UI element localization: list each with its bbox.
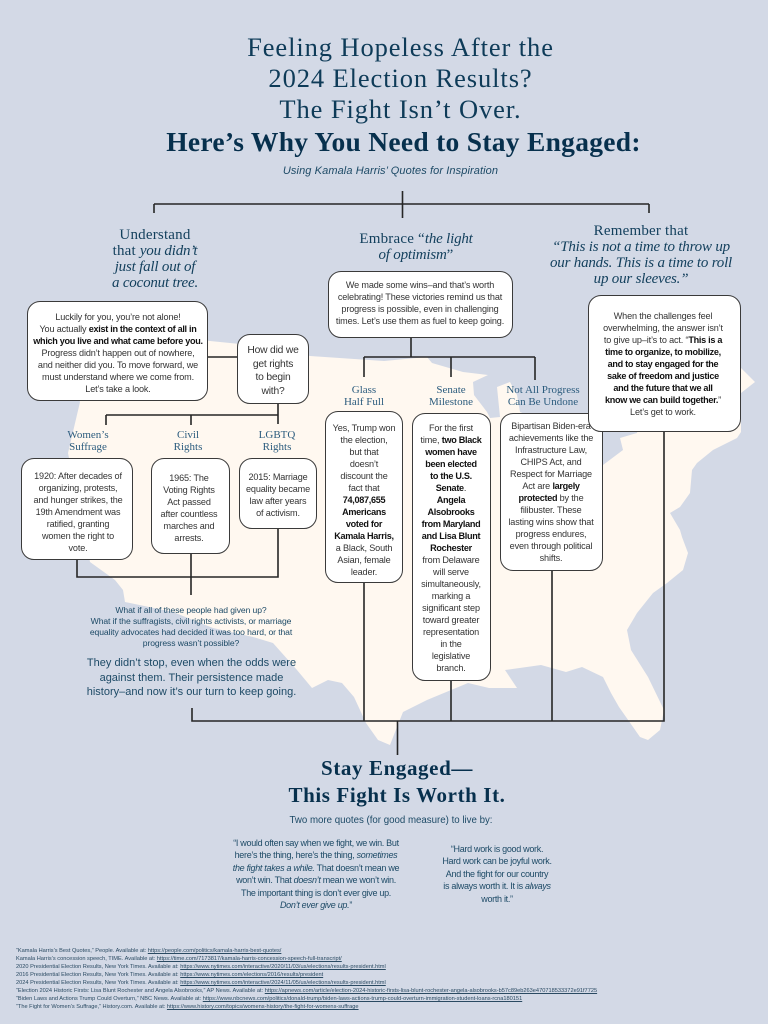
text: they didn't stop: They didn’t stop, even when the odds were xyxy=(87,657,296,669)
heading: senate milestone: Milestone xyxy=(429,396,473,408)
text: senate milestone: Angela xyxy=(437,495,465,505)
text: senate milestone: from Delaware xyxy=(422,555,480,565)
text: not all progress: Infrastructure Law, xyxy=(515,445,587,455)
text: not all progress: shifts. xyxy=(540,553,562,563)
text: context: You actually exist in the context of all in xyxy=(39,324,197,334)
text: 1965: marches and xyxy=(164,521,214,531)
text: remember: sake of freedom and justice xyxy=(607,371,719,381)
heading: civil rights: Rights xyxy=(174,441,202,453)
text: not all progress: CHIPS Act, and xyxy=(520,457,582,467)
sources: “Kamala Harris’s Best Quotes,” People. Available at: https://people.com/politics/kamala-harris-best-quotes/ xyxy=(16,948,281,954)
text: senate milestone: For the first xyxy=(429,423,473,433)
text: question: get rights xyxy=(253,359,293,370)
text: senate milestone: women have xyxy=(425,447,477,457)
text: remember: When the challenges feel xyxy=(614,311,712,321)
text: remember: time to organize, to mobilize, xyxy=(605,347,721,357)
quote: hard work: worth it.” xyxy=(481,894,513,904)
text: 2015: law after years xyxy=(250,496,306,506)
text: glass half full: doesn’t xyxy=(350,459,378,469)
heading: embrace: Embrace “the light xyxy=(359,231,473,247)
panel: 1965 xyxy=(151,458,230,554)
text: not all progress: filibuster. These xyxy=(520,505,581,515)
sources: “Election 2024 Historic Firsts: Lisa Blunt Rochester and Angela Alsobrooks,” AP News. Available at: https://apnews.com/article/election-2024-historic-firsts-lisa-blunt-rochester-angela-alsobrooks-b57c89eb263e470718533372e91f7725 xyxy=(16,988,597,994)
text: context: and neither did you. To move forward, we xyxy=(38,360,198,370)
text: senate milestone: time, two Black xyxy=(420,435,482,445)
heading: LGBTQ rights: LGBTQ xyxy=(259,429,295,441)
text: glass half full: Yes, Trump won xyxy=(333,423,395,433)
panel: remember xyxy=(588,295,741,432)
text: optimism xyxy=(336,280,504,326)
quote: hard work: Hard work can be joyful work. xyxy=(442,856,552,866)
text: remember: to give up–it’s to act. “This is a xyxy=(604,335,722,345)
text: what if: What if the suffragists, civil rights activists, or marriage xyxy=(91,616,291,626)
text: optimism: celebrating! These victories remind us that xyxy=(338,292,502,302)
text: 1920 xyxy=(33,471,123,553)
quote: fight takes a while: won’t win. That doesn’t mean we won’t win. xyxy=(236,875,396,885)
text: 2015: 2015: Marriage xyxy=(248,472,308,482)
text: context xyxy=(33,312,203,394)
sources: 2016 Presidential Election Results, New York Times. Available at: https://www.nytimes.com/elections/2016/results/president xyxy=(16,972,323,978)
quote: hard work: “Hard work is good work. xyxy=(451,844,543,854)
text: not all progress: Respect for Marriage xyxy=(510,469,592,479)
heading: not all progress: Can Be Undone xyxy=(508,396,578,408)
quote: fight takes a while: here’s the thing, here’s the thing, sometimes xyxy=(235,850,397,860)
heading: understand: that you didn’t xyxy=(113,243,197,259)
text: senate milestone: representation xyxy=(423,627,479,637)
panel: not all progress xyxy=(500,413,603,571)
text: senate milestone xyxy=(420,423,482,673)
text: senate milestone: legislative xyxy=(432,651,470,661)
text: 2015 xyxy=(246,472,310,518)
sources: “Biden Laws and Actions Trump Could Overturn,” NBC News. Available at: https://www.nbcnews.com/politics/donald-trump/biden-laws-actions-trump-could-overturn-immigration-student-loans-rcna180151 xyxy=(16,996,522,1002)
heading: civil rights xyxy=(174,429,202,453)
text: glass half full: but that xyxy=(349,447,379,457)
quote: fight takes a while: “I would often say when we fight, we win. But xyxy=(233,838,399,848)
heading: civil rights: Civil xyxy=(177,429,199,441)
text: 1920: 1920: After decades of xyxy=(34,471,122,481)
heading: stay engaged: Stay Engaged— xyxy=(321,756,473,780)
panel: context xyxy=(27,301,208,401)
text: senate milestone: toward greater xyxy=(423,615,479,625)
heading: remember: our hands. This is a time to roll xyxy=(550,255,732,271)
text: context: which you live and what came before you. xyxy=(33,336,203,346)
text: remember: know we can build together.” xyxy=(605,395,721,405)
text: glass half full: Kamala Harris, xyxy=(334,531,394,541)
text: senate milestone: been elected xyxy=(425,459,477,469)
text: two more quotes: Two more quotes (for good measure) to live by: xyxy=(290,815,492,826)
heading: remember: “This is not a time to throw up xyxy=(552,239,730,255)
text: glass half full: fact that xyxy=(348,483,380,493)
text: senate milestone: marking a xyxy=(432,591,470,601)
heading: stay engaged: This Fight Is Worth It. xyxy=(288,782,506,806)
text: optimism: We made some wins–and that’s worth xyxy=(346,280,494,290)
sources: Kamala Harris’s concession speech, TIME. Available at: https://time.com/7173817/kamala-harris-concession-speech-full-transcript/ xyxy=(16,956,342,962)
panel: how did we get rights xyxy=(237,334,309,404)
text: they didn't stop: history–and now it’s our turn to keep going. xyxy=(87,686,296,698)
heading: senate milestone: Senate xyxy=(436,384,466,396)
text: what if: What if all of these people had given up? xyxy=(115,605,267,615)
text: not all progress: even through political xyxy=(510,541,592,551)
heading: understand: a coconut tree. xyxy=(112,275,198,291)
heading: embrace xyxy=(359,231,474,263)
heading: remember xyxy=(550,223,732,287)
heading: women's suffrage xyxy=(67,429,109,453)
text: not all progress: Act are largely xyxy=(522,481,580,491)
heading: LGBTQ rights xyxy=(258,429,296,453)
title: Feeling Hopeless After the xyxy=(247,32,554,62)
quote: hard work: And the fight for our country xyxy=(446,869,548,879)
heading: understand: just fall out of xyxy=(115,259,195,275)
text: senate milestone: to the U.S. xyxy=(430,471,472,481)
text: they didn't stop xyxy=(87,657,296,698)
text: senate milestone: Rochester xyxy=(430,543,472,553)
text: remember: and to stay engaged for the xyxy=(608,359,718,369)
text: glass half full: discount the xyxy=(340,471,388,481)
quote: fight takes a while: Don’t ever give up.” xyxy=(280,900,352,910)
text: context: Let’s take a look. xyxy=(85,384,151,394)
text: 1920: ratified, granting xyxy=(47,519,109,529)
text: senate milestone: Alsobrooks xyxy=(427,507,475,517)
text: 1965: arrests. xyxy=(174,533,204,543)
text: remember: overwhelming, the answer isn’t xyxy=(603,323,723,333)
text: remember: Let’s get to work. xyxy=(630,407,696,417)
text: not all progress: Bipartisan Biden-era xyxy=(511,421,591,431)
title xyxy=(166,32,641,157)
sources: “The Fight for Women’s Suffrage,” History.com. Available at: https://www.history.com/topics/womens-history/the-fight-for-womens-suffrage xyxy=(16,1004,359,1010)
text: senate milestone: from Maryland xyxy=(422,519,480,529)
heading: remember: Remember that xyxy=(594,223,688,239)
text: glass half full: voted for xyxy=(346,519,382,529)
sources xyxy=(16,948,598,1010)
text: question: How did we xyxy=(247,345,299,356)
heading: understand: Understand xyxy=(119,227,191,243)
text: senate milestone: branch. xyxy=(436,663,466,673)
panel: senate milestone xyxy=(412,413,491,681)
text: senate milestone: and Lisa Blunt xyxy=(422,531,480,541)
heading: senate milestone xyxy=(429,384,473,408)
text: they didn't stop: against them. Their persistence made xyxy=(100,672,283,684)
text: 1965 xyxy=(160,473,218,543)
panel: optimism xyxy=(328,271,513,338)
text: context: must understand where we come from. xyxy=(42,372,194,382)
heading: stay engaged xyxy=(288,756,506,806)
text: optimism: progress is possible, even in challenging xyxy=(341,304,499,314)
text: senate milestone: will serve xyxy=(433,567,469,577)
quote: hard work: is always worth it. It is always xyxy=(443,881,551,891)
text: glass half full: Americans xyxy=(342,507,386,517)
subtitle: Using Kamala Harris’ Quotes for Inspiration xyxy=(283,165,498,177)
heading: glass half full: Glass xyxy=(352,384,376,396)
title: The Fight Isn’t Over. xyxy=(279,94,522,124)
title: 2024 Election Results? xyxy=(268,63,533,93)
text: glass half full: the election, xyxy=(340,435,388,445)
text: glass half full: a Black, South xyxy=(336,543,392,553)
text: question xyxy=(247,345,299,397)
text: remember xyxy=(603,311,723,417)
heading: remember: up our sleeves.” xyxy=(594,271,688,287)
text: context: Luckily for you, you’re not alone! xyxy=(55,312,181,322)
heading: LGBTQ rights: Rights xyxy=(263,441,291,453)
panel: glass half full xyxy=(325,411,403,583)
text: 1965: 1965: The xyxy=(169,473,209,483)
title: Here’s Why You Need to Stay Engaged: xyxy=(166,126,641,157)
quote: fight takes a while xyxy=(233,838,400,910)
heading: women's suffrage: Suffrage xyxy=(69,441,107,453)
text: senate milestone: significant step xyxy=(422,603,480,613)
text: not all progress: lasting wins show that xyxy=(508,517,594,527)
text: senate milestone: Senate. xyxy=(436,483,466,493)
text: what if: progress wasn’t possible? xyxy=(143,638,239,648)
text: not all progress: protected by the xyxy=(518,493,583,503)
heading: understand xyxy=(112,227,198,291)
text: 1920: 19th Amendment was xyxy=(36,507,120,517)
quote: hard work xyxy=(442,844,552,904)
text: 2015: equality became xyxy=(246,484,310,494)
text: question: with? xyxy=(261,386,285,397)
quote: fight takes a while: The important thing is don’t ever give up. xyxy=(241,888,391,898)
heading: women's suffrage: Women’s xyxy=(67,429,109,441)
text: optimism: times. Let’s use them as fuel to keep going. xyxy=(336,316,504,326)
heading: embrace: of optimism” xyxy=(378,247,454,263)
panel: 1920 xyxy=(21,458,133,560)
text: glass half full: 74,087,655 xyxy=(343,495,385,505)
text: remember: and the future that we all xyxy=(613,383,713,393)
text: glass half full xyxy=(332,423,395,577)
sources: 2024 Presidential Election Results, New York Times. Available at: https://www.nytimes.com/interactive/2024/11/05/us/elections/results-president.html xyxy=(16,980,386,986)
text: 2015: of activism. xyxy=(256,508,300,518)
text: what if: equality advocates had decided it was too hard, or that xyxy=(90,627,292,637)
text: 1920: organizing, protests, xyxy=(39,483,117,493)
heading: not all progress: Not All Progress xyxy=(506,384,580,396)
text: 1920: women the right to xyxy=(42,531,114,541)
sources: 2020 Presidential Election Results, New York Times. Available at: https://www.nytimes.com/interactive/2020/11/03/us/elections/results-president.html xyxy=(16,964,386,970)
heading: glass half full: Half Full xyxy=(344,396,384,408)
text: senate milestone: in the xyxy=(440,639,462,649)
text: 1965: after countless xyxy=(161,509,217,519)
text: 1920: vote. xyxy=(69,543,87,553)
text: glass half full: leader. xyxy=(351,567,377,577)
heading: not all progress xyxy=(506,384,580,408)
text: senate milestone: simultaneously, xyxy=(421,579,481,589)
panel: 2015 xyxy=(239,458,317,529)
text: what if xyxy=(90,605,292,648)
text: not all progress: achievements like the xyxy=(509,433,593,443)
quote: fight takes a while: the fight takes a while. That doesn’t mean we xyxy=(233,863,399,873)
text: not all progress: progress endures, xyxy=(516,529,586,539)
heading: glass half full xyxy=(344,384,384,408)
text: not all progress xyxy=(508,421,594,563)
text: glass half full: Asian, female xyxy=(337,555,391,565)
text: 1920: and hunger strikes, the xyxy=(33,495,123,505)
text: 1965: Voting Rights xyxy=(163,485,215,495)
text: question: to begin xyxy=(255,372,291,383)
text: 1965: Act passed xyxy=(167,497,211,507)
text: context: Progress didn’t happen out of nowhere, xyxy=(41,348,195,358)
